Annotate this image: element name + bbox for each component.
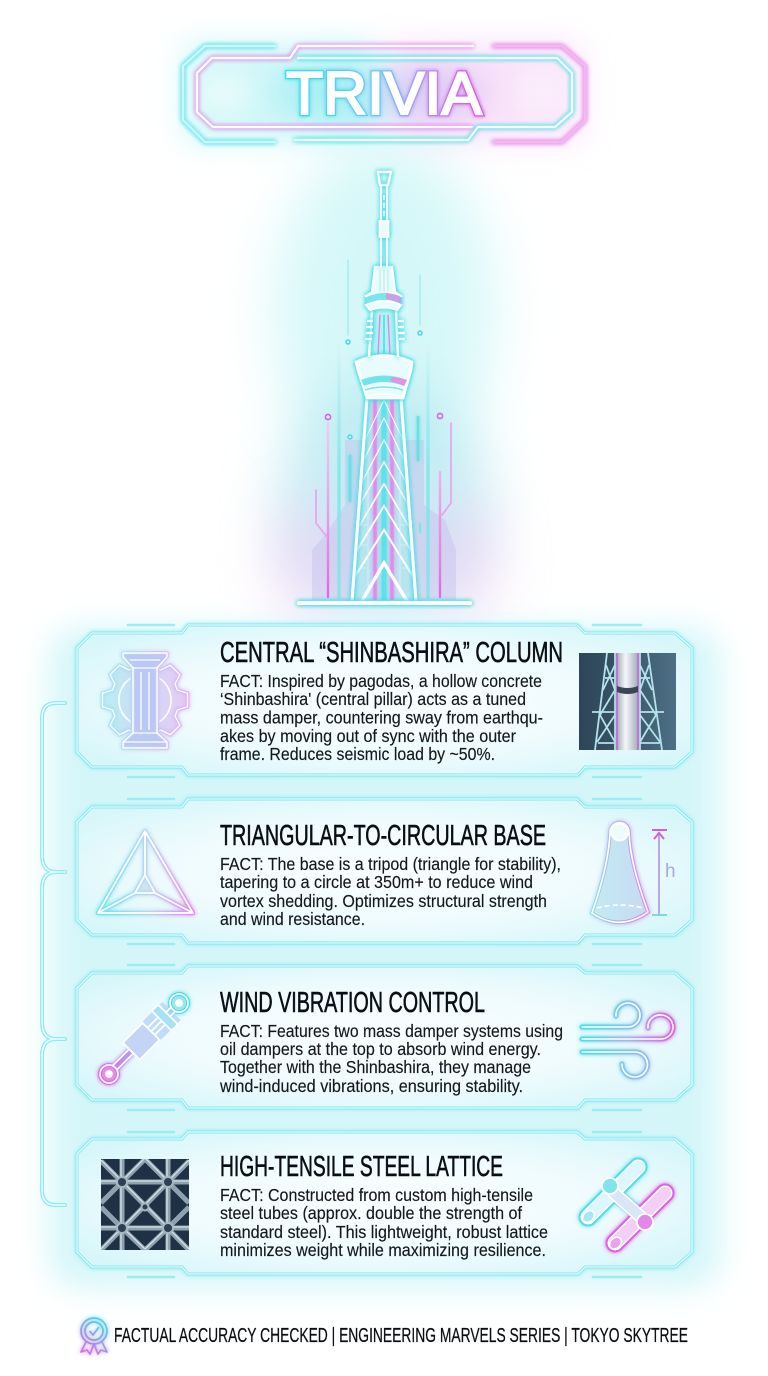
title text: TRIVIA: [286, 60, 482, 127]
title frame: [183, 46, 585, 142]
inner colour lines: [375, 315, 392, 600]
body text: [220, 854, 561, 929]
upper shaft: [369, 310, 398, 357]
panel frame 2: [77, 799, 692, 944]
icon: verified ribbon badge: [81, 1318, 107, 1354]
icon: column and gear: [102, 653, 188, 748]
icon: oil damper: [100, 994, 188, 1083]
body text: [220, 671, 543, 764]
body text: akes by moving out of sync with the outer: [220, 726, 516, 746]
upper observation deck: [366, 267, 401, 310]
photo: steel lattice: [101, 1158, 189, 1250]
tower backdrop silhouette: [312, 440, 456, 600]
panel frame 3: [77, 965, 692, 1110]
body text: minimizes weight while maximizing resilience.: [220, 1240, 546, 1260]
panel: triangular-to-circular base: [77, 799, 692, 944]
photo: central column inside lattice: [579, 653, 676, 750]
connector bracket: [42, 703, 65, 1205]
icon: wind: [582, 1003, 673, 1077]
lattice chevrons: [354, 400, 414, 601]
body text: [219, 1021, 563, 1096]
side fins: [366, 321, 404, 339]
tower illustration: [297, 172, 472, 605]
panel: central shinbashira column: [77, 625, 692, 777]
side neon lines: [316, 260, 451, 597]
body text: steel tubes (approx. double the strength of: [220, 1203, 522, 1223]
heading: CENTRAL “SHINBASHIRA” COLUMN: [220, 637, 563, 669]
tower shaft fill: [352, 398, 416, 600]
body text: and wind resistance.: [220, 909, 365, 929]
panel frame 1: [77, 625, 692, 777]
body text: frame. Reduces seismic load by ~50%.: [220, 744, 495, 764]
heading: HIGH-TENSILE STEEL LATTICE: [220, 1151, 503, 1183]
body text: [220, 1185, 548, 1260]
body text: tapering to a circle at 350m+ to reduce wind: [220, 872, 533, 892]
panel frame 4: [77, 1132, 692, 1277]
body text: FACT: The base is a tripod (triangle for stability),: [220, 854, 561, 874]
body text: mass damper, countering sway from earthqu-: [220, 708, 543, 728]
body text: ‘Shinbashira' (central pillar) acts as a tuned: [220, 689, 526, 709]
body text: standard steel). This lightweight, robust lattice: [220, 1222, 548, 1242]
ground line: [297, 601, 472, 605]
panel: high-tensile steel lattice: [77, 1132, 692, 1277]
footer: [81, 1318, 688, 1354]
lower observation deck: [356, 356, 412, 398]
title text: TRIVIA: [286, 60, 482, 127]
body text: wind-induced vibrations, ensuring stability.: [219, 1076, 523, 1096]
antenna: [378, 172, 391, 267]
body text: FACT: Features two mass damper systems using: [220, 1021, 563, 1041]
icon: steel tubes: [580, 1167, 665, 1251]
heading: TRIANGULAR-TO-CIRCULAR BASE: [220, 820, 546, 852]
tower legs: [352, 398, 416, 601]
body text: oil dampers at the top to absorb wind energy.: [220, 1039, 541, 1059]
body text: Together with the Shinbashira, they manage: [220, 1057, 531, 1077]
body text: FACT: Inspired by pagodas, a hollow concrete: [220, 671, 542, 691]
icon: tapered shape with height: h: [665, 861, 676, 882]
panel: wind vibration control: [77, 965, 692, 1110]
icon: triangle tripod: [98, 831, 193, 913]
body text: FACT: Constructed from custom high-tensile: [220, 1185, 533, 1205]
icon: tapered shape with height: [592, 822, 676, 922]
heading: WIND VIBRATION CONTROL: [220, 987, 485, 1019]
body text: vortex shedding. Optimizes structural strength: [220, 891, 547, 911]
